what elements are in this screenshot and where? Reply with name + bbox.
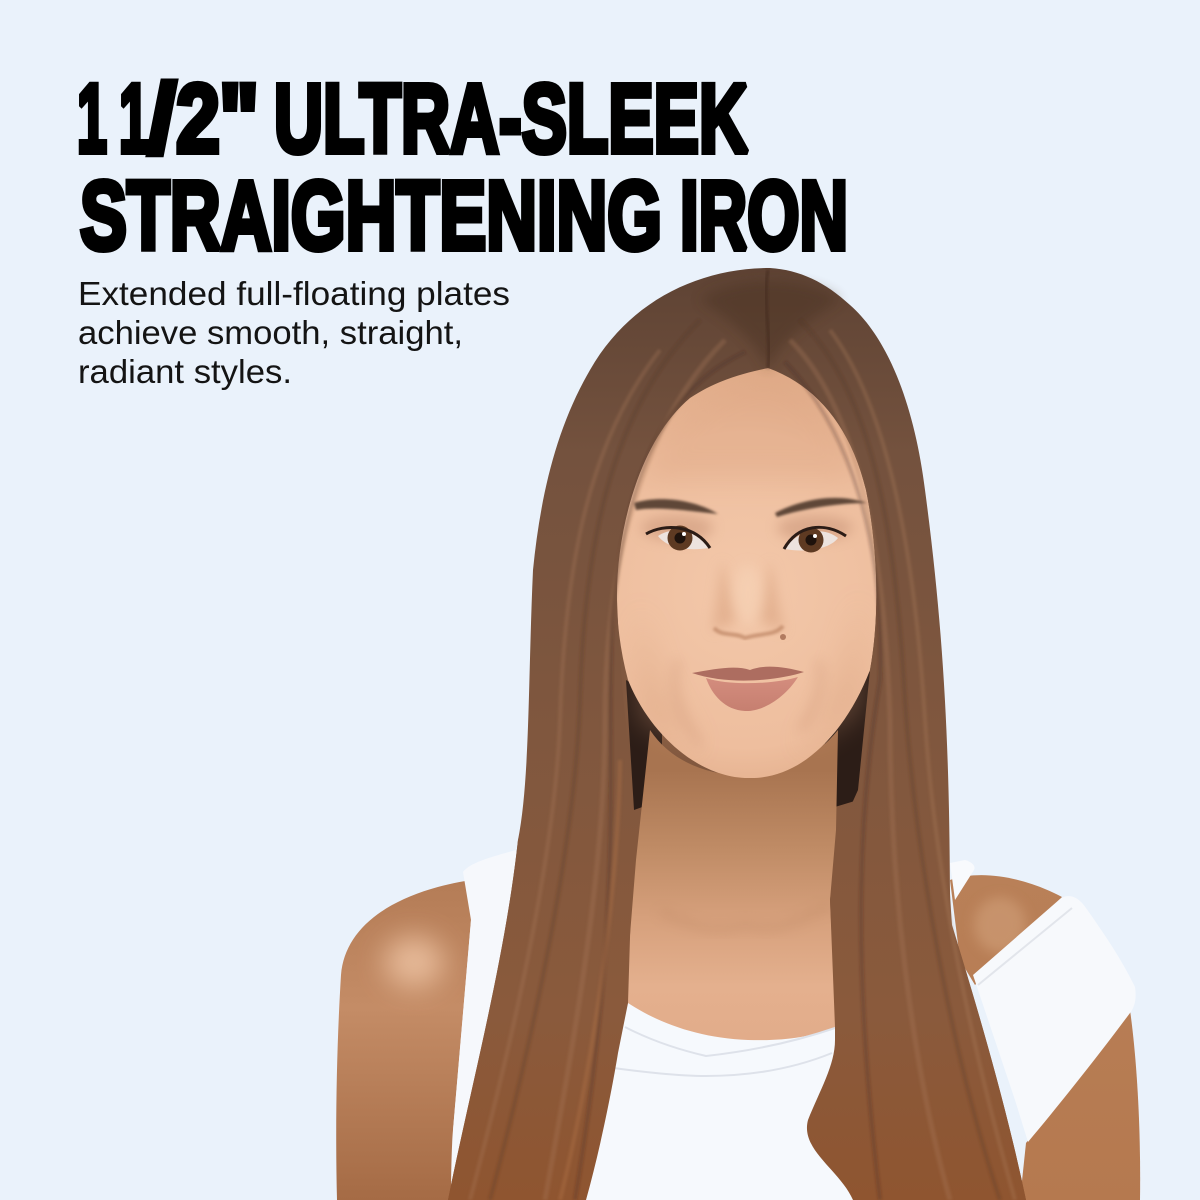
subtitle text block: achieve smooth, straight, <box>78 314 463 351</box>
white tank top straps and sleeve <box>451 850 1136 1200</box>
illustration: woman with long straight hair <box>336 268 1140 1200</box>
dark hair shadow beside neck <box>626 670 872 810</box>
title: ULTRA-SLEEK <box>274 64 748 173</box>
hair strands <box>470 320 1015 1200</box>
top neckline rib <box>607 1027 835 1076</box>
nose <box>714 626 783 638</box>
lips <box>692 667 804 711</box>
eye socket shading <box>641 515 853 632</box>
face <box>616 368 876 778</box>
title <box>77 64 848 270</box>
title: IRON <box>680 161 848 270</box>
title: 1 <box>77 64 107 173</box>
hair parting <box>766 270 769 368</box>
nose highlight <box>733 565 763 625</box>
title: 2 <box>176 64 220 173</box>
right hair lock <box>768 290 1026 1200</box>
hair crown part shadow <box>700 281 840 370</box>
left eye <box>646 526 710 550</box>
beauty mark <box>780 634 786 640</box>
left hair lock <box>448 289 768 1200</box>
neck and chest <box>620 730 838 1060</box>
hair back <box>448 268 1026 1200</box>
title: " <box>219 64 259 173</box>
right shoulder and arm <box>950 875 1140 1200</box>
title: 1 <box>119 64 149 173</box>
title: STRAIGHTENING <box>80 161 662 270</box>
collar bone shading <box>660 905 830 929</box>
left eyebrow <box>634 499 718 514</box>
left arm and shoulder <box>336 880 471 1200</box>
subtitle text block: radiant styles. <box>78 353 292 390</box>
subtitle text block <box>78 275 510 390</box>
smile fold shading <box>675 660 820 745</box>
white tank top front <box>570 1003 885 1200</box>
right eyebrow <box>775 498 867 517</box>
subtitle text block: Extended full-floating plates <box>78 275 510 312</box>
right eye <box>784 527 846 552</box>
title: / <box>148 64 176 173</box>
forehead and jaw shading <box>640 372 860 750</box>
